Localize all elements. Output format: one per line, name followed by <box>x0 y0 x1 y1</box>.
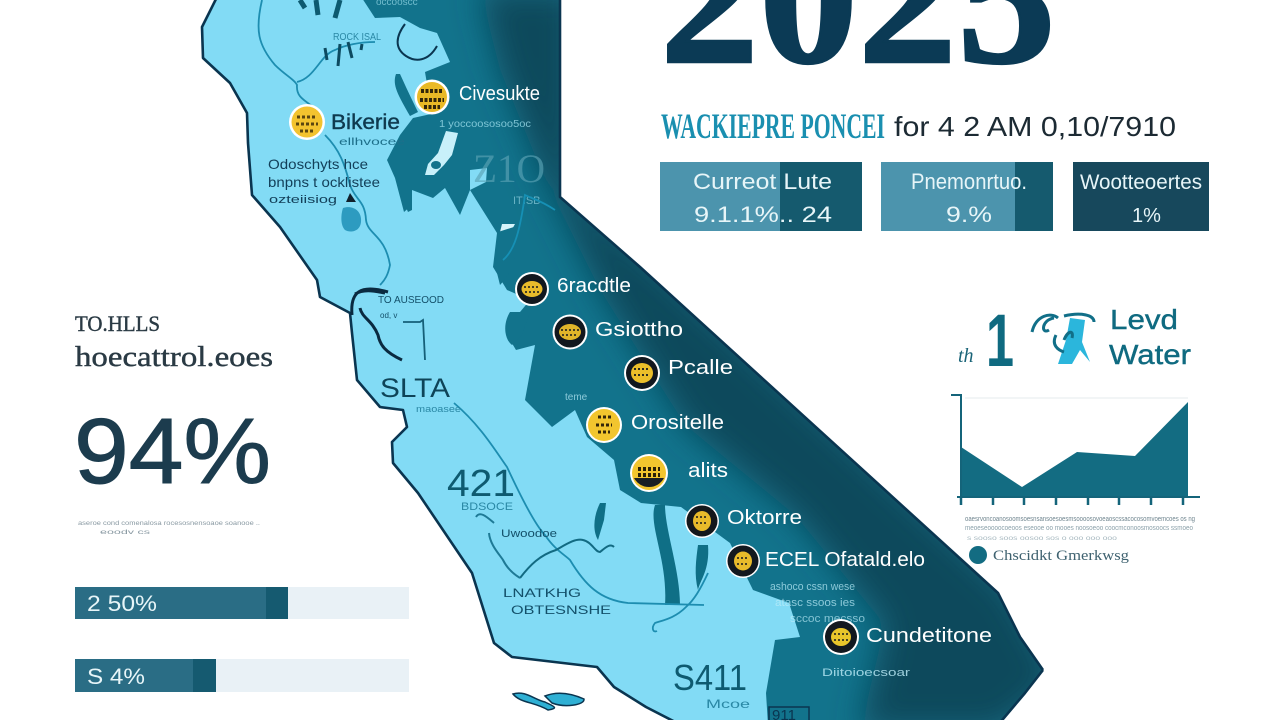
stat card: third <box>1073 162 1209 231</box>
city marker 3 <box>515 272 549 306</box>
small reservoir <box>341 207 361 231</box>
small caption <box>78 520 260 536</box>
city marker 4 <box>552 314 588 350</box>
city labels on dark region: 6racdtle <box>557 275 631 297</box>
city labels on dark region: Oktorre <box>727 507 802 529</box>
chart legend <box>969 546 1130 564</box>
map labels: od, v <box>380 311 397 320</box>
city labels on dark region: Orositelle <box>631 412 724 434</box>
subtitle: WACKIEPRE PONCEI <box>661 106 885 146</box>
map labels: Mcoe <box>706 697 750 711</box>
faded numerals on dark region: teme <box>565 392 588 403</box>
city label: Bikerie <box>331 111 406 148</box>
map text block: Odoschyts hce <box>268 156 368 172</box>
city labels on dark region: Cundetitone <box>866 625 992 647</box>
chart caption: meoeseoooocoeoos eseooe oo mooes noosoeoo coocmconoosmosoocs ssmoeo <box>965 525 1193 532</box>
subtitle: for 4 2 AM 0,10/7910 <box>894 111 1176 142</box>
map labels: S411 <box>673 657 747 698</box>
stat card: current rate <box>660 162 862 231</box>
water level heading: Levd <box>1110 304 1178 335</box>
map labels: Uwoodoe <box>501 528 557 540</box>
map of California <box>202 0 1060 720</box>
city marker: north inland <box>414 80 450 114</box>
progress bar 2: S 4% <box>87 664 145 689</box>
stat card: current rate: Curreot Lute <box>693 169 832 194</box>
state land fill <box>202 0 1043 720</box>
faded numerals on dark region: atasc ssoos ies <box>775 597 856 609</box>
city labels on dark region: Civesukte <box>459 83 540 105</box>
left text heading <box>75 311 273 373</box>
city label: Bikerie: ellhvocee <box>339 137 406 148</box>
stat card: percentage: Pnemonrtuo. <box>911 169 1027 194</box>
map text block <box>268 156 380 206</box>
city marker 8 <box>685 504 719 538</box>
faded numerals on dark region: Z1O <box>473 146 545 191</box>
rivers <box>258 0 708 631</box>
map labels: ROCK ISAL <box>333 32 381 43</box>
left text heading: TO.HLLS <box>75 311 160 336</box>
faded numerals on dark region: 1 yoccoososoo5oc <box>439 119 531 130</box>
stat card: percentage: 9.% <box>946 202 992 227</box>
small caption: aseroe cond comenalosa rocesosnensoaoe soanooe .. <box>78 520 260 527</box>
map labels: 421 <box>447 463 515 505</box>
state outline <box>202 0 1043 720</box>
map labels: SLTA <box>380 373 450 403</box>
stat card: current rate: 9.1.1%.. 24 <box>694 202 832 227</box>
lakes and fingers on the dark edge <box>398 24 437 60</box>
dark shading <box>480 0 1060 720</box>
city marker: north coast <box>289 104 325 140</box>
channel islands <box>513 693 584 710</box>
progress bar 1 <box>75 587 409 619</box>
water level heading <box>958 299 1191 382</box>
city marker 10 <box>823 619 859 655</box>
icon: water figure <box>1032 314 1094 364</box>
map text block: ozteiisiog <box>269 194 337 206</box>
area chart <box>951 395 1200 505</box>
city marker 6 <box>586 407 622 443</box>
map labels: OBTESNSHE <box>511 603 611 617</box>
map text block: bnpns t ocklistee <box>268 174 380 190</box>
chart legend: Chscidkt Gmerkwsg <box>993 548 1130 564</box>
city labels on dark region <box>459 83 992 647</box>
map labels: LNATKHG <box>503 586 581 600</box>
city marker 7 <box>630 454 668 492</box>
water level heading: th <box>958 345 974 367</box>
map labels: TO AUSEOOD <box>378 295 444 306</box>
city labels on dark region: ECEL Ofatald.elo <box>765 549 925 571</box>
map labels: BDSOCE <box>461 501 513 513</box>
city labels on dark region: Gsiottho <box>595 319 683 341</box>
small caption: eoodv cs <box>100 529 151 536</box>
chart caption: oaesrvoncoanosoomsoesnsansoesoesmsoooosovoeaoscssacocosomvoemcoes os ng <box>965 516 1195 523</box>
stat card: percentage <box>881 162 1053 231</box>
city marker 5 <box>624 355 660 391</box>
faded numerals on dark region: ashoco cssn wese <box>770 581 855 593</box>
map labels: maoasee <box>416 404 461 414</box>
stat card: third: Wootteoertes <box>1080 171 1202 194</box>
chart caption: s sooso soos oosoo sos o ooo ooo ooo <box>967 536 1118 542</box>
northern tributaries <box>325 42 362 66</box>
progress bar 2 <box>75 659 409 692</box>
faded numerals on dark region: ITISB <box>513 195 541 207</box>
water level heading: Water <box>1109 339 1191 370</box>
left text heading: hoecattrol.eoes <box>75 342 273 373</box>
city label: Bikerie: Bikerie <box>331 111 400 134</box>
san francisco bay <box>352 289 402 360</box>
chart caption <box>965 516 1195 542</box>
city marker 9 <box>726 544 760 578</box>
eastern dark region <box>360 0 1060 720</box>
city labels on dark region: alits <box>688 460 728 482</box>
faded numerals on dark region <box>376 0 910 679</box>
water level heading: 1 <box>986 299 1014 382</box>
big stat 94%: 94% <box>74 399 271 503</box>
progress bar 1: 2 50% <box>87 591 157 616</box>
faded numerals on dark region: Diitoioecsoar <box>822 667 910 679</box>
stat card: third: 1% <box>1132 205 1161 227</box>
faded numerals on dark region: sccoc mecsso <box>790 613 865 625</box>
city labels on dark region: Pcalle <box>668 357 733 379</box>
map labels <box>333 32 809 720</box>
